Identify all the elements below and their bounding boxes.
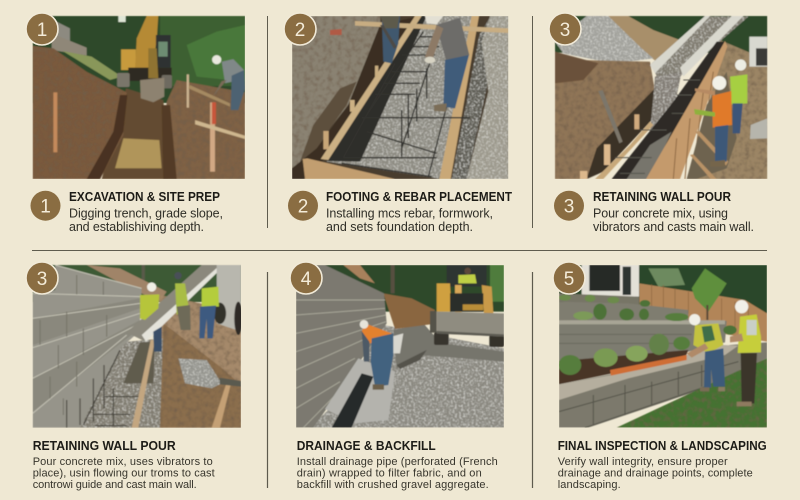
caption: drainage and backfill xyxy=(297,439,498,491)
caption: footing and rebar placement: Installing mcs rebar, formwork, xyxy=(326,206,493,220)
panel: excavation photo xyxy=(33,16,245,179)
vertical divider top left xyxy=(266,16,268,228)
caption: footing and rebar placement: FOOTING & REBAR PLACEMENT xyxy=(326,190,512,204)
badge: step 3 photo, bottom row xyxy=(26,262,58,294)
caption: drainage and backfill: backfill with crushed gravel aggregate. xyxy=(297,479,489,491)
caption: final inspection and landscaping: drainage and drainage points, complete xyxy=(558,468,753,480)
caption: retaining wall pour, top row xyxy=(554,190,754,234)
panel: drainage and backfill photo xyxy=(296,265,504,428)
caption: final inspection and landscaping xyxy=(558,439,767,491)
caption: excavation and site prep: and establishiving depth. xyxy=(69,220,204,234)
caption: retaining wall pour, bottom row xyxy=(33,439,215,491)
vertical divider bottom left xyxy=(266,272,268,488)
caption: final inspection and landscaping: Verify wall integrity, ensure proper xyxy=(558,456,728,468)
badge: step 4 photo: 4 xyxy=(301,269,312,290)
caption: retaining wall pour, top row: 3 xyxy=(564,196,574,218)
caption: retaining wall pour, top row: vibrators and casts main wall. xyxy=(593,220,754,234)
caption: footing and rebar placement xyxy=(288,190,512,234)
badge: step 2 photo: 2 xyxy=(295,20,305,41)
caption: drainage and backfill: Install drainage pipe (perforated (French xyxy=(297,456,498,468)
caption: retaining wall pour, bottom row: RETAINING WALL POUR xyxy=(33,439,176,453)
caption: retaining wall pour, top row: Pour concrete mix, using xyxy=(593,206,728,220)
caption: final inspection and landscaping: FINAL INSPECTION & LANDSCAPING xyxy=(558,439,767,453)
badge: step 4 photo xyxy=(290,262,322,294)
caption: retaining wall pour, bottom row: place), usin flowing our troms to cast xyxy=(33,468,215,480)
badge: step 3 photo xyxy=(549,13,581,45)
caption: footing and rebar placement: and sets foundation depth. xyxy=(326,220,473,234)
caption: retaining wall pour, bottom row: controwi guide and cast main wall. xyxy=(33,479,197,491)
panel: retaining wall pour photo, bottom row xyxy=(33,265,242,428)
caption: footing and rebar placement: 2 xyxy=(298,196,308,218)
horizontal divider between rows xyxy=(32,250,767,252)
caption: drainage and backfill: DRAINAGE & BACKFILL xyxy=(297,439,436,453)
caption: excavation and site prep: EXCAVATION & SITE PREP xyxy=(69,190,220,204)
caption: drainage and backfill: drain) wrapped to filter fabric, and on xyxy=(297,468,482,480)
panel: footing and rebar photo xyxy=(292,16,508,179)
badge: step 1 photo: 1 xyxy=(37,20,47,41)
badge: step 3 photo, bottom row: 3 xyxy=(37,269,47,290)
badge: step 5 photo: 5 xyxy=(564,269,574,290)
panel: retaining wall pour photo, top row xyxy=(555,16,767,179)
badge: step 2 photo xyxy=(284,13,316,45)
caption: retaining wall pour, bottom row: Pour concrete mix, uses vibrators to xyxy=(33,456,213,468)
caption: excavation and site prep xyxy=(30,190,223,234)
badge: step 1 photo xyxy=(26,13,58,45)
vertical divider top right xyxy=(532,16,534,228)
badge: step 5 photo xyxy=(553,262,585,294)
badge: step 3 photo: 3 xyxy=(560,20,570,41)
caption: final inspection and landscaping: landscaping. xyxy=(558,479,621,491)
panel: final inspection and landscaping photo xyxy=(559,265,767,428)
caption: excavation and site prep: 1 xyxy=(40,196,51,218)
caption: retaining wall pour, top row: RETAINING WALL POUR xyxy=(593,190,731,204)
caption: excavation and site prep: Digging trench, grade slope, xyxy=(69,206,223,220)
vertical divider bottom right xyxy=(532,272,534,488)
